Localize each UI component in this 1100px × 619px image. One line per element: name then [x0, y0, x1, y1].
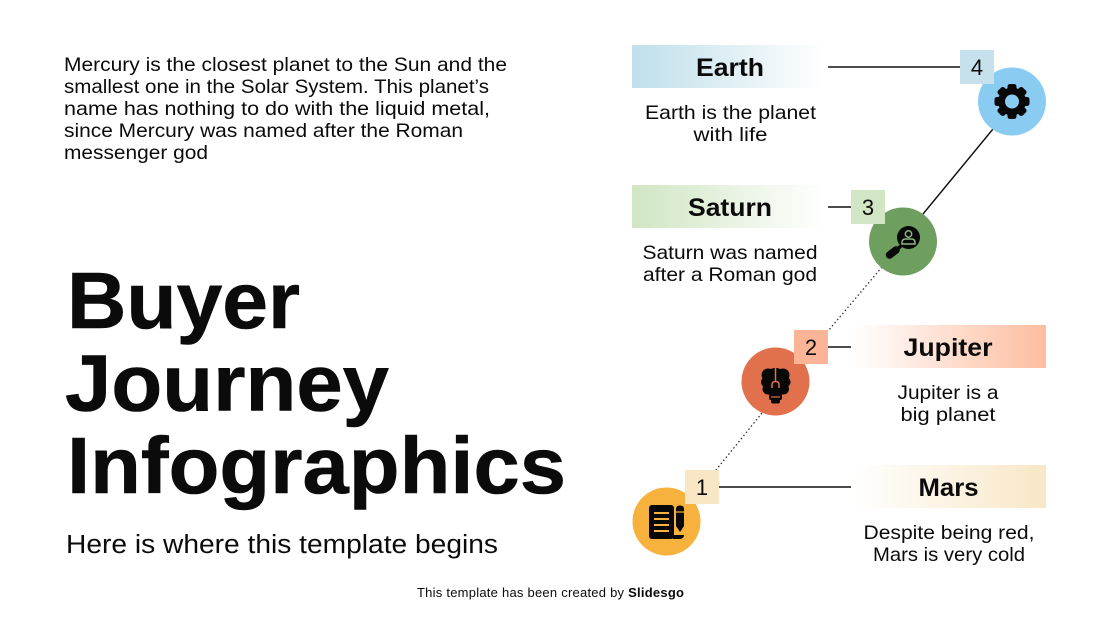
Saturn circle	[869, 208, 937, 276]
Earth description	[645, 102, 817, 146]
journey connector: dotted segment 3 to 2	[828, 267, 882, 331]
Mars heading: Mars	[918, 474, 978, 502]
Jupiter leader line	[828, 346, 851, 348]
Jupiter description: big planet	[900, 404, 996, 426]
Saturn heading: Saturn	[688, 194, 772, 222]
Earth heading: Earth	[696, 54, 764, 82]
Saturn description: after a Roman god	[643, 264, 817, 286]
Mars description: Despite being red,	[864, 522, 1034, 544]
Jupiter heading: Jupiter	[904, 334, 993, 362]
title: Journey	[65, 338, 389, 428]
step 1: Mars	[632, 465, 1046, 566]
intro text block	[64, 54, 507, 164]
journey connector: solid segment 4 to 3	[923, 129, 993, 214]
subtitle: Here is where this template begins	[66, 531, 498, 559]
Earth label bar	[632, 45, 825, 88]
title	[65, 256, 566, 510]
Jupiter circle	[742, 348, 810, 416]
intro text block: since Mercury was named after the Roman	[64, 120, 463, 142]
journey connector: dotted segment 2 to 1	[716, 413, 762, 470]
intro text block: smallest one in the Solar System. This planet’s	[64, 76, 489, 98]
Earth leader line	[828, 66, 960, 68]
Saturn description: Saturn was named	[642, 242, 818, 264]
icon: brain light bulb	[761, 368, 790, 404]
title: Buyer	[67, 256, 300, 345]
number badge 3: 3	[862, 195, 874, 220]
Earth circle	[978, 68, 1046, 136]
Earth description: Earth is the planet	[645, 102, 817, 124]
Saturn description	[642, 242, 818, 286]
icon: magnifier with person	[890, 226, 920, 255]
number badge 4: 4	[971, 55, 983, 80]
intro text block: messenger god	[64, 142, 208, 164]
title: Infographics	[67, 421, 566, 510]
step 2: Jupiter	[742, 325, 1046, 426]
number badge 1	[685, 470, 719, 504]
step 4: Earth	[632, 45, 1046, 146]
Saturn leader line	[828, 206, 851, 208]
Mars description: Mars is very cold	[873, 544, 1025, 566]
number badge 2: 2	[805, 335, 817, 360]
step 3: Saturn	[632, 185, 937, 286]
number badge 2	[794, 330, 828, 364]
number badge 3	[851, 190, 885, 224]
Earth description: with life	[692, 124, 768, 146]
Saturn label bar	[632, 185, 825, 228]
number badge 1: 1	[696, 475, 708, 500]
intro text block: Mercury is the closest planet to the Sun and the	[64, 54, 507, 76]
number badge 4	[960, 50, 994, 84]
Jupiter label bar	[853, 325, 1046, 368]
icon: gear	[994, 84, 1030, 119]
Mars circle	[632, 488, 700, 556]
Mars description	[864, 522, 1034, 566]
Jupiter description	[898, 382, 999, 426]
footer credit: This template has been created by Slidesgo	[417, 585, 684, 600]
Mars label bar	[853, 465, 1046, 508]
icon: document and pencil	[649, 505, 684, 539]
Mars leader line	[719, 486, 851, 488]
intro text block: name has nothing to do with the liquid metal,	[64, 98, 490, 120]
Jupiter description: Jupiter is a	[898, 382, 999, 404]
